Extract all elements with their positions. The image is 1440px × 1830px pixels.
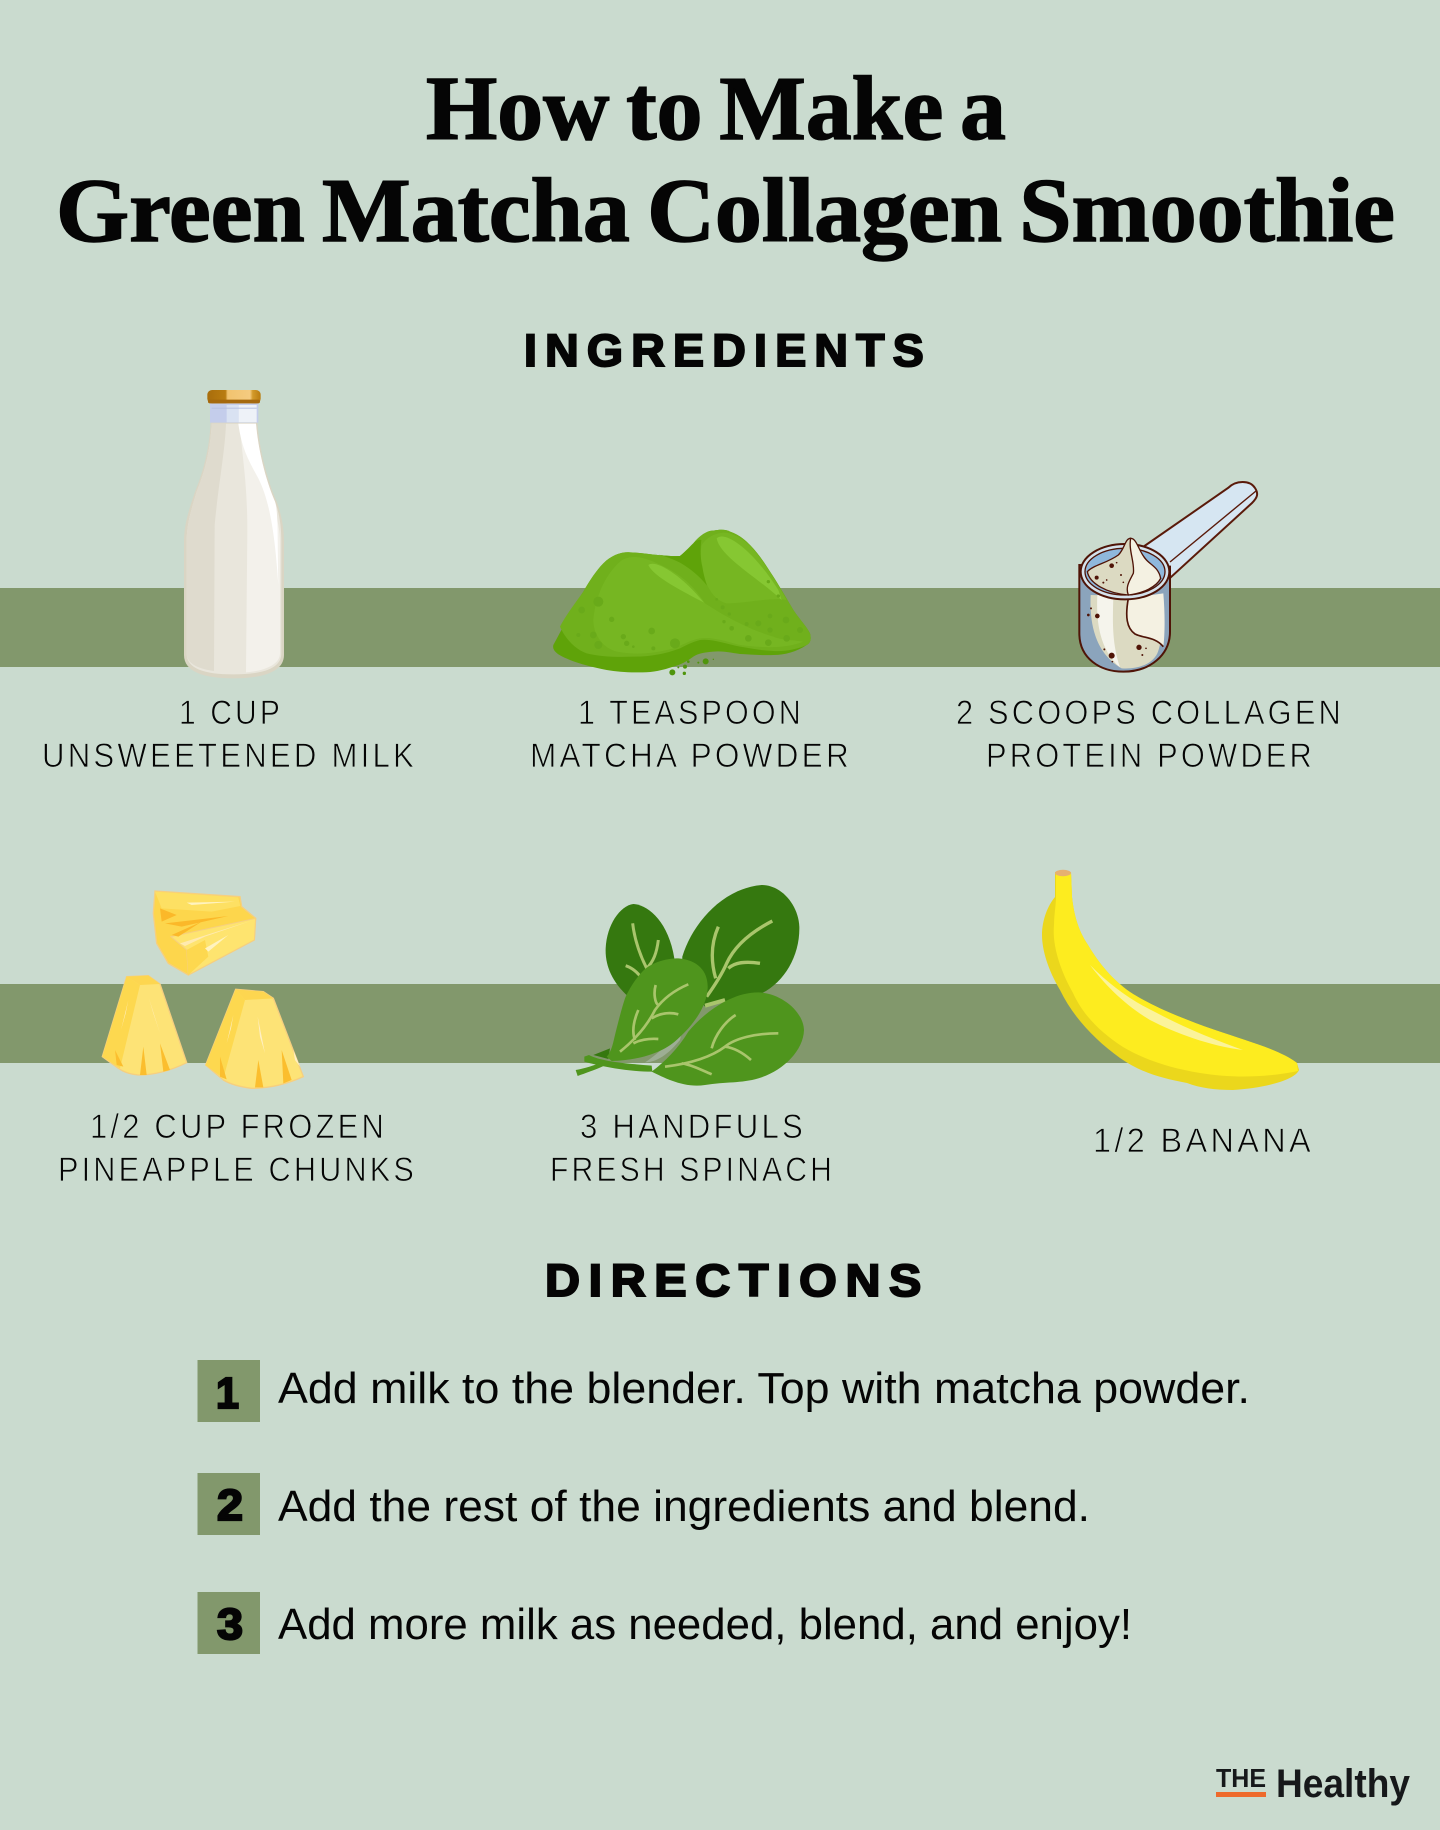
icon: matcha powder mound	[553, 530, 811, 675]
label: matcha: MATCHA POWDER	[530, 737, 852, 775]
heading: directions: DIRECTIONS	[545, 1255, 930, 1306]
logo: The Healthy: Healthy	[1276, 1762, 1411, 1806]
band: first ingredient row	[0, 588, 1440, 667]
logo: The Healthy: THE	[1216, 1763, 1266, 1793]
step 3	[198, 1592, 1132, 1654]
label: milk: 1 CUP	[179, 694, 283, 732]
ingredient: pineapple	[58, 891, 417, 1189]
step number box 2	[198, 1473, 260, 1535]
label: milk	[42, 694, 417, 775]
icon: milk bottle	[184, 390, 284, 678]
label: collagen: PROTEIN POWDER	[986, 737, 1315, 775]
title: Green Matcha Collagen Smoothie	[56, 160, 1395, 261]
label: pineapple: PINEAPPLE CHUNKS	[58, 1151, 417, 1189]
icon: pineapple chunks	[102, 891, 303, 1088]
label: collagen: 2 SCOOPS COLLAGEN	[956, 694, 1344, 732]
step number box 3	[198, 1592, 260, 1654]
ingredient: collagen	[956, 482, 1344, 775]
step number box 1	[198, 1360, 260, 1422]
label: banana: 1/2 BANANA	[1093, 1122, 1314, 1160]
label: spinach: FRESH SPINACH	[550, 1151, 835, 1189]
step text 2: Add the rest of the ingredients and blend.	[278, 1482, 1090, 1531]
label: pineapple	[58, 1108, 417, 1189]
icon: spinach leaves	[576, 885, 804, 1086]
step number box 3: 3	[217, 1600, 243, 1649]
heading: ingredients: INGREDIENTS	[524, 325, 932, 376]
label: matcha	[530, 694, 852, 775]
step text 1: Add milk to the blender. Top with matcha powder.	[278, 1364, 1250, 1413]
label: milk: UNSWEETENED MILK	[42, 737, 417, 775]
label: matcha: 1 TEASPOON	[578, 694, 804, 732]
step 2	[198, 1473, 1090, 1535]
logo: The Healthy	[1216, 1762, 1411, 1806]
step 1	[198, 1360, 1250, 1422]
step number box 2: 2	[217, 1481, 243, 1530]
icon: collagen scoop	[1079, 482, 1257, 672]
step text 3: Add more milk as needed, blend, and enjoy!	[278, 1600, 1132, 1649]
band: second ingredient row	[0, 984, 1440, 1063]
ingredient: milk	[42, 390, 417, 775]
label: collagen	[956, 694, 1344, 775]
step number box 1: 1	[216, 1369, 239, 1418]
ingredient: spinach	[550, 885, 835, 1189]
title	[56, 58, 1395, 261]
ingredient: matcha	[530, 530, 852, 775]
icon: banana	[1042, 870, 1299, 1090]
label: spinach	[550, 1108, 835, 1189]
label: spinach: 3 HANDFULS	[580, 1108, 806, 1146]
title: How to Make a	[426, 58, 1006, 159]
ingredient: banana	[1042, 870, 1314, 1160]
label: pineapple: 1/2 CUP FROZEN	[90, 1108, 387, 1146]
